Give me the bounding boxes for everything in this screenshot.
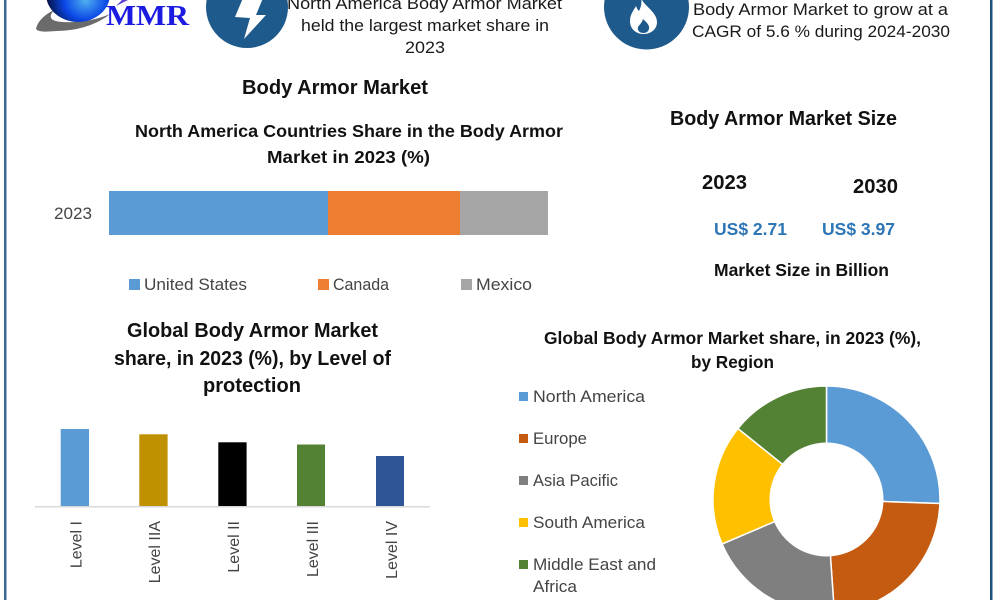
panel: level of protection <box>35 320 430 583</box>
text: North America share callout: 2023 <box>405 38 445 57</box>
heading: countries share: Market in 2023 (%) <box>267 147 430 167</box>
icon: lightning bolt <box>206 0 288 48</box>
year 2030 value <box>822 176 898 239</box>
heading: level of protection: protection <box>203 375 301 397</box>
text: North America share callout: held the largest market share in <box>301 16 549 35</box>
caption: market size unit: Market Size in Billion <box>714 260 889 280</box>
year 2023 value: 2023 <box>702 172 747 194</box>
year 2023 value <box>702 172 787 239</box>
legend: regions: Africa <box>533 577 578 596</box>
year 2030 value: US$ 3.97 <box>822 219 895 239</box>
bar chart: Level I <box>68 521 86 568</box>
legend: countries: Mexico <box>476 275 532 294</box>
legend: regions: South America <box>533 513 646 532</box>
heading: level of protection: Global Body Armor Market <box>127 320 378 342</box>
panel: market size <box>670 108 898 280</box>
stacked bar chart: 2023 <box>54 205 92 223</box>
heading: countries share: North America Countries Share in the Body Armor <box>135 121 563 141</box>
logo: MMR globe <box>36 0 190 32</box>
icon: flame <box>604 0 689 50</box>
heading: share by region: Global Body Armor Market share, in 2023 (%), <box>544 328 921 348</box>
heading: market size: Body Armor Market Size <box>670 108 897 130</box>
panel: share by region <box>519 328 940 600</box>
text: CAGR callout: Body Armor Market to grow at a <box>693 0 949 19</box>
year 2023 value: US$ 2.71 <box>714 219 787 239</box>
heading: level of protection: share, in 2023 (%), by Level of <box>114 348 391 370</box>
heading: share by region <box>544 328 921 372</box>
stacked bar chart <box>54 191 548 235</box>
legend: regions <box>519 387 656 596</box>
year 2030 value: 2030 <box>853 176 898 198</box>
text: CAGR callout: CAGR of 5.6 % during 2024-2030 <box>692 22 950 41</box>
legend: regions: Asia Pacific <box>533 471 618 490</box>
legend: countries <box>129 275 532 294</box>
donut chart <box>713 386 940 600</box>
bar chart: Level IV <box>384 521 401 579</box>
legend: countries: Canada <box>333 275 390 294</box>
heading: share by region: by Region <box>691 352 774 372</box>
heading: level of protection <box>114 320 391 397</box>
bar chart <box>35 429 430 583</box>
legend: regions: North America <box>533 387 646 406</box>
panel: North America countries share <box>54 121 563 294</box>
legend: countries: United States <box>144 275 247 294</box>
text: CAGR callout <box>692 0 950 41</box>
heading: countries share <box>135 121 563 167</box>
legend: regions: Europe <box>533 429 587 448</box>
logo: MMR globe: MMR <box>106 0 190 32</box>
bar chart: Level IIA <box>147 521 164 583</box>
bar chart: Level II <box>226 521 243 573</box>
bar chart: Level III <box>305 521 322 577</box>
text: North America share callout <box>287 0 562 57</box>
legend: regions: Middle East and <box>533 555 656 574</box>
title: Body Armor Market <box>242 77 428 99</box>
